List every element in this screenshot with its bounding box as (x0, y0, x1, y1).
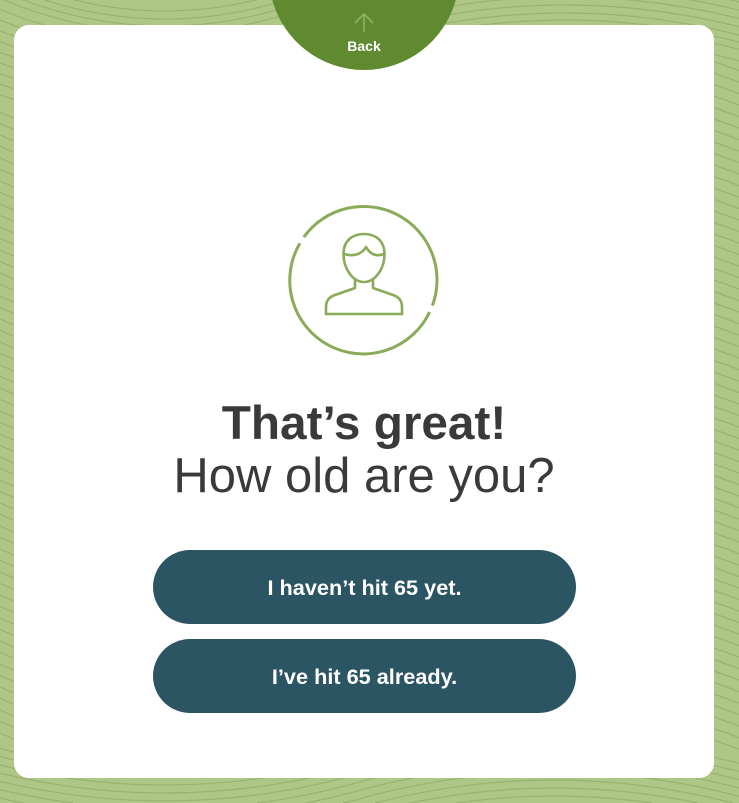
heading question line: How old are you? (173, 449, 555, 503)
back button (272, 0, 456, 70)
button: not yet 65 (153, 550, 576, 624)
icon: person in ring (288, 205, 438, 356)
heading (173, 397, 555, 503)
button: already 65: I’ve hit 65 already. (272, 664, 457, 689)
person (326, 234, 402, 314)
button: not yet 65: I haven’t hit 65 yet. (267, 575, 462, 600)
heading bold line: That’s great! (222, 397, 506, 450)
back label: Back (347, 38, 381, 54)
button: already 65 (153, 639, 576, 713)
icon: up arrow (355, 14, 373, 32)
ring (290, 206, 437, 354)
